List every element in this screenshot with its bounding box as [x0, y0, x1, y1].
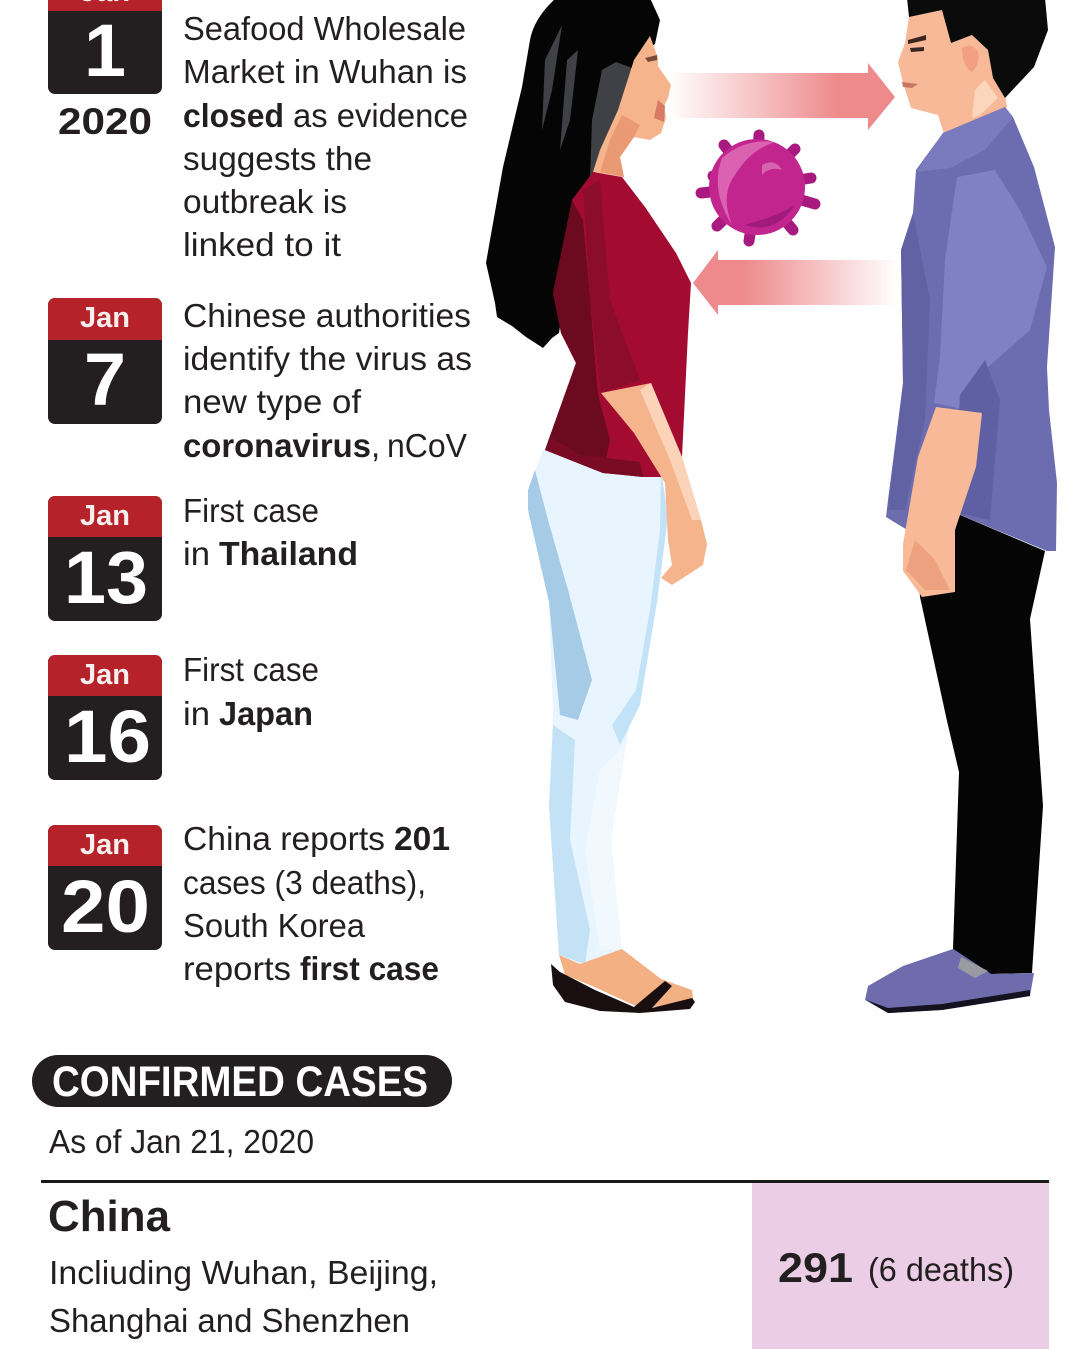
- event text: China and South Korea: [183, 820, 450, 987]
- timeline entry: Jan 1 2020: [48, 0, 468, 263]
- event text: market closed: outbreak is: [183, 183, 347, 220]
- event text: market closed: Market in Wuhan is: [183, 53, 467, 90]
- illustration: woman: [486, 0, 707, 1013]
- event text: Thailand: in: [183, 535, 210, 572]
- event text: new coronavirus identified: Chinese authorities: [183, 297, 471, 334]
- value cell background: [752, 1183, 1049, 1349]
- event text: China and South Korea: cases (3 deaths),: [183, 864, 426, 901]
- event text: Japan: [183, 651, 319, 732]
- man trousers: [915, 512, 1045, 974]
- country name: China: [48, 1192, 171, 1241]
- event text: market closed: linked to it: [183, 226, 341, 263]
- calendar icon: Jan 13: 13: [64, 536, 148, 619]
- woman face and neck: [593, 36, 671, 177]
- man head: [898, 10, 1007, 160]
- man shoe: [865, 949, 1034, 1013]
- man arm and hand: [903, 407, 982, 597]
- event text: new coronavirus identified: nCoV: [387, 427, 467, 464]
- calendar icon: Jan 13: [48, 496, 162, 621]
- calendar icon: Jan 7: 7: [84, 338, 126, 421]
- timeline entry: Jan 7: [48, 297, 472, 464]
- event text: new coronavirus identified: coronavirus: [183, 427, 371, 464]
- event text: new coronavirus identified: [183, 297, 472, 464]
- event text: market closed: closed: [183, 97, 284, 134]
- country description: Shanghai and Shenzhen: [49, 1302, 410, 1339]
- event text: Thailand: Thailand: [219, 535, 358, 572]
- event text: new coronavirus identified: new type of: [183, 383, 362, 420]
- arrow: woman to man: [668, 63, 895, 130]
- calendar icon: Jan 20: [48, 825, 162, 950]
- country description: [49, 1254, 438, 1339]
- virus spikes: [701, 135, 815, 241]
- event text: Japan: in: [183, 695, 210, 732]
- calendar icon: Jan 20: Jan: [80, 829, 130, 861]
- calendar icon: Jan 1: [48, 0, 162, 94]
- woman legs: white trousers: [528, 450, 668, 964]
- date note: As of Jan 21, 2020: [49, 1123, 314, 1160]
- man shirt: [886, 107, 1057, 551]
- event text: China and South Korea: China reports: [183, 820, 385, 857]
- event text: China and South Korea: South Korea: [183, 907, 366, 944]
- case count: 291: [778, 1244, 853, 1291]
- case count: (6 deaths): [868, 1251, 1014, 1288]
- woman arm and hand: [601, 383, 707, 585]
- badge: confirmed cases: CONFIRMED CASES: [52, 1058, 428, 1106]
- event text: Thailand: First case: [183, 492, 319, 529]
- calendar icon: Jan 1: 1: [84, 9, 126, 92]
- arrow: man to woman: [693, 250, 897, 315]
- event text: China and South Korea: first case: [300, 950, 439, 987]
- event text: market closed: Seafood Wholesale: [183, 10, 466, 47]
- event text: Japan: Japan: [219, 695, 313, 732]
- woman shirt: [545, 172, 691, 477]
- case count: [778, 1244, 1014, 1291]
- event text: China and South Korea: reports: [183, 950, 291, 987]
- woman hair: [486, 0, 660, 348]
- country description: Incliuding Wuhan, Beijing,: [49, 1254, 438, 1291]
- event text: market closed: suggests the: [183, 140, 372, 177]
- event text: Japan: First case: [183, 651, 319, 688]
- illustration: man: [865, 0, 1057, 1013]
- icon: virus: [701, 135, 815, 241]
- calendar icon: Jan 20: 20: [61, 865, 150, 948]
- timeline entry: Jan 13: [48, 492, 358, 621]
- calendar icon: Jan 16: Jan: [80, 659, 130, 691]
- event text: new coronavirus identified: identify the virus as: [183, 340, 472, 377]
- table row: China: [41, 1180, 1049, 1349]
- event text: new coronavirus identified: ,: [371, 427, 380, 464]
- event text: market closed: [183, 10, 468, 263]
- timeline entry: Jan 20: [48, 820, 450, 987]
- hair highlights: [542, 25, 632, 182]
- event text: market closed: as evidence: [293, 97, 468, 134]
- event text: China and South Korea: 201: [394, 820, 450, 857]
- calendar icon: Jan 13: Jan: [80, 500, 130, 532]
- calendar icon: Jan 7: Jan: [80, 302, 130, 334]
- year label: 2020: [58, 101, 152, 142]
- timeline entry: Jan 16: [48, 651, 319, 780]
- event text: Thailand: [183, 492, 358, 572]
- woman foot and sandal: [551, 949, 695, 1013]
- calendar icon: Jan 16: 16: [64, 695, 151, 778]
- calendar icon: Jan 16: [48, 655, 162, 780]
- calendar icon: Jan 7: [48, 298, 162, 424]
- virus body: [709, 139, 805, 235]
- man hair: [907, 0, 1048, 98]
